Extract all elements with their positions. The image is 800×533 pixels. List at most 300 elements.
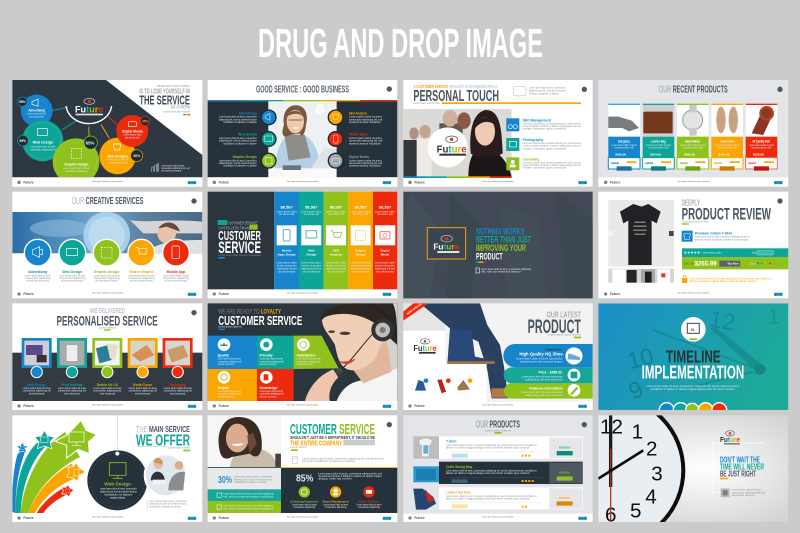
panel: left services: Lorem ipsum dolor sit amet, consectetur xyxy=(219,137,257,140)
circle: web design xyxy=(87,450,147,510)
pill: features: Lorem ipsum dolor sit amet consectetur xyxy=(521,391,563,394)
note: Lorem ipsum dolor sit amet, consectetur adipiscing elit, sed do eiusmod xyxy=(302,457,384,460)
panel: right services: Lorem ipsum dolor sit amet, xyxy=(349,116,383,119)
settings icon xyxy=(777,87,783,92)
footer: Your topic of Business presentation xyxy=(92,404,123,407)
column: digital media: sit amet consectetur xyxy=(375,264,395,267)
heading: Lorem ipsum dolor sit amet xyxy=(413,102,440,105)
service: photography xyxy=(506,138,581,151)
clock face: 2 xyxy=(646,437,657,460)
column: seo analysis: Analysis xyxy=(330,253,342,257)
panel: dark stats: Lorem ipsum dolor sit amet xyxy=(292,503,317,506)
footer: Future xyxy=(23,516,34,520)
feature: premium cotton t-shirt: Premium Cotton T-Shirt xyxy=(695,231,733,235)
settings icon xyxy=(582,87,587,92)
band: price: $265.99 xyxy=(695,261,717,267)
tile labels: Lorem ipsum dolor sit amet xyxy=(23,387,51,390)
product card: sunglass: Lorem ipsum dolor sit amet xyxy=(612,144,637,147)
footer xyxy=(17,292,196,296)
calendar badge: 01 xyxy=(691,328,695,332)
heading: PERSONALISED SERVICE xyxy=(57,312,158,328)
tile: knowledge: Lorem ipsum dolor sit amet xyxy=(260,390,283,393)
column: seo analysis: adipiscing elit sed xyxy=(326,267,347,270)
pill: high quality: Product Name xyxy=(545,348,562,351)
product card: loafer shoe xyxy=(711,104,743,171)
band: rating: Size xyxy=(752,253,757,255)
circle: seo analysis: 36% xyxy=(133,154,141,158)
icon and note: chart: Lorem ipsum dolor sit amet, xyxy=(161,164,185,167)
panel: left services xyxy=(208,101,268,177)
product row: cloth bag: $266.99 xyxy=(559,471,570,475)
service labels: elit sed eiusmod tempor xyxy=(61,280,84,283)
heading: nothing works: NOTHING WORKS xyxy=(476,226,524,236)
circle: graphic design: Lorem ipsum dolor sit amet xyxy=(63,167,90,170)
column: web design: $6,587 xyxy=(305,205,318,210)
panel: right services: consectetur adipiscing elit, sed xyxy=(349,162,383,165)
faint clock face: 9 xyxy=(624,375,647,405)
settings icon xyxy=(387,86,392,92)
heading xyxy=(218,309,302,330)
footer xyxy=(403,402,593,410)
column: graphic design: Lorem ipsum dolor xyxy=(351,261,371,264)
tile: knowledge: sed do eiusmod xyxy=(260,396,277,398)
panel: thirty percent: adipiscing elit, sed do eiusmod tempor xyxy=(234,478,272,481)
product card: leather bag: Leather Bag xyxy=(651,140,666,144)
qr icon and note xyxy=(721,488,766,497)
footer: Future xyxy=(219,180,229,184)
column: digital media: Lorem ipsum dolor xyxy=(375,261,395,264)
column: mobile apps design: do eiusmod xyxy=(278,271,296,273)
product card: belt xyxy=(746,104,777,171)
band: green xyxy=(208,501,281,513)
heading: Lorem ipsum dolor sit xyxy=(218,326,242,329)
footer: Your topic of Business presentation xyxy=(287,516,318,519)
connectors xyxy=(52,107,117,140)
logo box xyxy=(427,228,466,259)
background photo: hanging shirts xyxy=(403,192,593,298)
feature: premium cotton t-shirt xyxy=(682,231,751,242)
qr icon and note: eiusmod tempor xyxy=(732,494,755,497)
column: mobile apps design: sit amet consectetur xyxy=(277,264,297,267)
tile: quality: sed do eiusmod xyxy=(218,364,235,366)
product row: leather shoe xyxy=(413,487,583,510)
panel: left services: adipiscing elit, sed do eiusmod tempor xyxy=(219,118,257,121)
circle: advertising: Lorem ipsum dolor sit xyxy=(27,113,46,116)
logo panel: Future xyxy=(413,344,437,353)
band: teal xyxy=(208,489,281,501)
circle: advertising xyxy=(18,95,53,127)
footer: Your topic of Business presentation xyxy=(92,292,123,295)
product card: hand watch: Hand Watch xyxy=(685,140,700,144)
footer: Future xyxy=(219,292,229,296)
tile labels: Print Mockup xyxy=(61,383,83,387)
heading: Lorem ipsum dolor sit amet xyxy=(682,220,709,223)
heading xyxy=(720,455,764,479)
slide 9: personalised service xyxy=(12,303,202,410)
service: seo management: minim veniam quis nostrud xyxy=(523,128,567,131)
tile: knowledge: consectetur adipiscing elit xyxy=(260,393,284,396)
heading: Lorem ipsum dolor sit amet xyxy=(548,334,581,337)
clock face: 3 xyxy=(651,462,663,485)
tile: friendly: consectetur adipiscing elit xyxy=(260,360,284,363)
panel: thirty percent: 30% xyxy=(218,475,232,486)
icon and note: chart xyxy=(152,164,190,173)
column: seo analysis: Lorem ipsum dolor xyxy=(326,261,346,264)
footer: Your topic of Business presentation xyxy=(92,516,123,519)
circle: digital media xyxy=(116,115,150,147)
photo: agent with headset xyxy=(305,303,397,401)
feature: premium cotton t-shirt: Lorem ipsum dolor sit amet, consectetur adipiscing elit sed do xyxy=(695,236,751,239)
footer xyxy=(598,177,788,187)
circle: advertising: amet, consectetur xyxy=(29,115,44,118)
clock face xyxy=(598,415,686,522)
slide 3: personal touch xyxy=(403,80,593,187)
tile: satisfaction: sed do eiusmod xyxy=(297,364,314,366)
footer xyxy=(604,292,783,296)
faint clock face xyxy=(628,310,778,398)
footer: Future xyxy=(414,516,425,520)
service: consulting: Consulting xyxy=(523,157,539,161)
panel: left services: Lorem ipsum dolor sit amet, consectetur xyxy=(219,159,257,162)
column: seo analysis xyxy=(324,192,348,289)
tile labels: Lorem ipsum dolor sit amet xyxy=(164,387,192,390)
column: digital media: sit amet elit xyxy=(377,213,393,216)
pill: price: Price : $456.00 xyxy=(539,371,562,375)
band: price: Buy Now xyxy=(728,263,738,266)
slide 13: main service we offer xyxy=(12,415,202,522)
star: green web xyxy=(55,420,97,458)
heading: PERSONAL TOUCH xyxy=(413,88,499,105)
circle: web design: Lorem ipsum dolor sit amet, consectetur xyxy=(100,488,137,491)
slide 16: don't wait clock xyxy=(598,415,788,522)
heading: OUR CREATIVE SERVICES xyxy=(72,196,144,207)
column: web design: Design xyxy=(306,253,316,257)
service labels: elit sed eiusmod tempor xyxy=(26,280,49,283)
service: photography: minim veniam quis nostrud xyxy=(523,147,567,150)
heading: WE ARE READY TO LOYALTY xyxy=(218,309,281,316)
qr icon and note: Lorem ipsum dolor sit amet, xyxy=(732,489,762,492)
product card: belt: consectetur elit xyxy=(751,147,772,150)
product card: sunglass xyxy=(608,104,640,171)
heading xyxy=(136,424,190,451)
logo arc and wordmark xyxy=(66,98,112,124)
note: incididunt ut labore et dolore xyxy=(149,505,182,508)
heading xyxy=(413,84,581,105)
panel: right services: SEO Analysis xyxy=(349,111,367,115)
panel: dark stats: Lorem ipsum dolor sit amet xyxy=(323,503,348,506)
column: graphic design: $6,587 xyxy=(355,205,368,210)
product card: belt: Hi Quality Belt xyxy=(753,140,771,144)
column: mobile apps design: Mobile xyxy=(282,249,292,253)
column: graphic design: Design xyxy=(356,253,366,257)
panel: left services: Lorem ipsum dolor sit amet, consectetur xyxy=(219,116,257,119)
tile: quality: Quality xyxy=(218,354,229,358)
logo xyxy=(720,431,740,444)
star: blue xyxy=(16,442,28,453)
panel: dark title: CUSTOMER SERVICE xyxy=(227,220,257,225)
footer: Future xyxy=(219,404,229,408)
pill: high quality: High Quality HQ Shoe xyxy=(519,352,563,357)
faint clock face: 12 xyxy=(707,305,738,335)
heading: OUR RECENT PRODUCTS xyxy=(659,85,728,96)
heading: customer service: Lorem ipsum xyxy=(290,446,307,449)
product card: belt: Lorem ipsum dolor sit amet xyxy=(749,144,774,147)
tile labels: Packaging xyxy=(169,383,186,387)
heading: customer service: SHOULDN'T JUST BE A DEPARTMENT, IT SHOULD BE xyxy=(290,435,375,441)
circle: web design: consectetur adipiscing elit xyxy=(30,148,56,151)
circle: graphic design: Graphic Design xyxy=(64,161,89,166)
panel: dark stats: 85% xyxy=(296,473,313,484)
service: seo management: SEO Management xyxy=(523,118,552,122)
panel: dark title: SERVICE xyxy=(218,238,261,257)
heading: TIME WILL NEVER xyxy=(720,463,764,472)
product card: belt: $228.99 xyxy=(753,152,764,156)
service labels: Web Design xyxy=(62,270,82,274)
service circles xyxy=(24,239,189,266)
pill: high quality: Lorem ipsum dolor sit amet consectetur xyxy=(516,357,563,360)
heading: OUR PRODUCTS xyxy=(476,420,520,431)
circle: seo analysis: SEO Analysis xyxy=(107,154,128,158)
rainbow star streaks xyxy=(12,432,80,513)
heading: BE JUST RIGHT xyxy=(720,470,756,479)
circle: digital media: 45% xyxy=(142,119,149,123)
pill: high quality xyxy=(503,344,593,367)
settings icon xyxy=(777,198,783,204)
panel: left services: incididunt ut labore et dolore xyxy=(223,165,257,168)
tile: quality: consectetur adipiscing elit xyxy=(218,360,242,363)
body text xyxy=(647,385,740,391)
panel: right services: Mobile Apps xyxy=(349,133,368,137)
band: price: Color xyxy=(750,262,756,265)
panel: left services: adipiscing elit, sed do eiusmod tempor xyxy=(219,162,257,165)
circle: web design: Web Design xyxy=(104,482,131,487)
tile: satisfaction: consectetur adipiscing elit xyxy=(297,360,321,363)
tile labels: sed eiusmod xyxy=(100,393,116,395)
icon glyphs xyxy=(265,114,339,164)
service labels: elit sed eiusmod tempor xyxy=(165,280,188,283)
photo: team xyxy=(403,109,512,177)
heading: customer service xyxy=(290,422,375,451)
heading xyxy=(682,198,771,225)
dotted connector xyxy=(116,415,118,450)
tile: knowledge: Knowledge xyxy=(260,386,278,390)
tile labels: sed eiusmod xyxy=(29,393,45,395)
speech bubble note: adipiscing elit, sed do eiusmod xyxy=(529,89,566,92)
notice: lock xyxy=(682,275,771,283)
tile labels: Lorem ipsum dolor sit amet xyxy=(58,387,86,390)
speech bubble note: tempor incididunt ut labore xyxy=(529,92,560,95)
note xyxy=(292,456,384,464)
column: seo analysis: do eiusmod xyxy=(327,271,346,273)
heading: customer service: CUSTOMER SERVICE xyxy=(290,422,375,438)
product card: sunglass: consectetur elit xyxy=(614,147,634,150)
pill: high quality: adipiscing elit sed eiusmod tempor xyxy=(520,360,563,363)
note: elit, sed do eiusmod tempor xyxy=(481,271,521,274)
slide 15: our products xyxy=(403,415,593,522)
tile labels: Book Cover xyxy=(133,383,153,387)
pill: price: Lorem ipsum dolor sit amet consectetur xyxy=(521,375,563,378)
heading: the service: OF OTHERS xyxy=(171,105,190,110)
star: orange xyxy=(67,463,86,481)
panel: dark stats: Lorem ipsum dolor sit amet, consectetur adipiscing elit, sed xyxy=(318,472,382,475)
circle: seo analysis: consectetur elit xyxy=(108,162,128,165)
heading: A CUSTOMER SERVICE APOLOGY IS STRONGER WITH A xyxy=(413,84,498,90)
footer xyxy=(17,516,196,520)
column: web design: sit amet consectetur xyxy=(301,264,322,267)
body text: Lorem ipsum dolor sit amet, consectetur adipiscing elit, sed do eiusmod tempor xyxy=(647,385,740,388)
slide 12: timeline implementation xyxy=(598,303,788,417)
product row: t-shirt: Lorem ipsum dolor sit amet, consectetur adipiscing elit, sed do eiusmod tempor incididunt ut xyxy=(446,444,537,447)
shoe thumbnails xyxy=(412,378,472,394)
tile: satisfaction xyxy=(294,336,339,369)
service labels: Lorem ipsum dolor sit amet xyxy=(25,274,51,277)
logo box: Future xyxy=(433,242,460,251)
heading: nothing works: BETTER THAN JUST xyxy=(476,235,531,245)
tile: helpful: sed do eiusmod xyxy=(218,396,235,398)
photo: woman xyxy=(268,101,337,177)
service labels: Advertising xyxy=(28,270,47,274)
tile labels: Lorem ipsum dolor sit amet xyxy=(129,387,157,390)
slide 6: customer service columns xyxy=(208,192,397,298)
notice: lock: labore et dolore magna aliqua enim ad minim veniam xyxy=(690,280,757,283)
slide 5: creative services xyxy=(12,192,202,298)
tile labels: Mobile UI/ UX xyxy=(97,383,119,387)
text panel outline xyxy=(712,443,765,493)
footer xyxy=(213,516,391,520)
calendar badge xyxy=(681,317,706,342)
service: consulting: minim veniam quis nostrud xyxy=(523,167,567,170)
icon and note: chart: do eiusmod tempor xyxy=(161,170,182,173)
circle: seo analysis xyxy=(99,138,143,174)
panel: left services: incididunt ut labore et dolore xyxy=(223,142,257,145)
heading: GOOD SERVICE : GOOD BUSINESS xyxy=(256,85,349,96)
ribbon: new: NEW ARRIVAL xyxy=(406,302,423,316)
service labels xyxy=(25,270,190,283)
footer: Future xyxy=(219,516,229,520)
panel: right services: Lorem ipsum dolor sit amet, xyxy=(349,137,383,140)
round icons xyxy=(31,366,183,378)
service labels: Lorem ipsum dolor sit amet xyxy=(163,274,189,277)
heading xyxy=(476,420,520,434)
faint clock face: 1 xyxy=(768,306,779,328)
product card: loafer shoe: consectetur elit xyxy=(717,147,737,150)
speech bubble note xyxy=(513,86,566,97)
heading xyxy=(528,309,581,338)
panel: left services: incididunt ut labore et dolore xyxy=(223,121,257,124)
settings icon xyxy=(387,422,392,427)
dark diagonal background xyxy=(12,80,202,177)
panel: right services: eiusmod tempor incididunt xyxy=(349,121,381,124)
clock face: 4 xyxy=(645,486,657,509)
product card: hand watch: $800.99 xyxy=(684,152,695,156)
service labels: Search Engine xyxy=(129,270,153,274)
panel: right services: eiusmod tempor incididunt xyxy=(349,165,381,168)
slide 7: nothing works better xyxy=(403,192,593,298)
heading: nothing works: PRODUCT xyxy=(476,251,503,261)
pill: price xyxy=(504,367,593,383)
title: DRUG AND DROP IMAGE xyxy=(258,20,543,66)
footer xyxy=(17,404,196,408)
product row: t-shirt: T-Shirt xyxy=(446,440,457,444)
footer xyxy=(213,404,391,408)
product card: hand watch xyxy=(677,104,709,171)
heading: PRODUCT xyxy=(528,317,581,338)
tile: helpful xyxy=(208,369,257,401)
product card: loafer shoe: $484.99 xyxy=(719,152,730,156)
service labels: elit sed eiusmod tempor xyxy=(130,280,153,283)
column: graphic design xyxy=(348,192,373,289)
circle: web design: 35% xyxy=(19,139,26,143)
product card: loafer shoe: Lorem ipsum dolor sit amet xyxy=(715,144,740,147)
service labels: Lorem ipsum dolor sit amet xyxy=(128,274,155,277)
column: seo analysis: Lorem ipsum dolor xyxy=(326,210,346,213)
colour strip xyxy=(403,176,512,178)
column: web design: Lorem ipsum dolor xyxy=(301,261,322,264)
photo: jeans and shoes xyxy=(403,303,593,398)
tile labels: sed eiusmod xyxy=(170,393,186,395)
product row: leather shoe: labore et dolore magna aliqua enim ad minim veniam quis nostrud xyxy=(446,498,530,501)
star: teal xyxy=(35,430,54,449)
tile: helpful: Helpful xyxy=(218,386,229,390)
panel: dark stats: consectetur adipiscing xyxy=(325,506,347,509)
service: seo management: tempor incididunt ut labore et dolore magna aliqua enim ad xyxy=(523,125,581,128)
column: web design xyxy=(299,192,324,289)
heading: the service: IS TO LOSE YOURSELF IN xyxy=(139,89,190,96)
pill: features: Features description xyxy=(529,387,563,391)
note: adipiscing elit, sed do eiusmod tempor xyxy=(149,503,187,506)
heading: DEEPLY xyxy=(682,198,700,208)
tile: friendly: Lorem ipsum dolor sit amet xyxy=(260,358,283,361)
panel: thirty percent: incididunt ut labore et dolore xyxy=(234,481,268,484)
band: teal: elit, sed do eiusmod tempor incididunt xyxy=(223,495,274,498)
product row: leather shoe: Lorem ipsum dolor sit amet, consectetur adipiscing elit, sed do eiusmod tempor incididunt ut xyxy=(446,495,537,498)
circle: advertising: 55% xyxy=(19,100,26,104)
feature: premium cotton t-shirt: eiusmod tempor incididunt ut labore et dolore magna xyxy=(695,238,749,241)
service: consulting: tempor incididunt ut labore et dolore magna aliqua enim ad xyxy=(523,164,581,167)
column: web design: Web xyxy=(308,249,315,253)
clock face: 5 xyxy=(630,499,641,522)
service: consulting: Lorem ipsum dolor sit amet, consectetur adipiscing elit, sed do eiusmod xyxy=(523,161,581,164)
footer: Future xyxy=(414,404,425,408)
tile: quality xyxy=(208,336,257,369)
ribbon: new xyxy=(403,302,428,321)
slide 4: recent products xyxy=(598,80,788,187)
heading: the service xyxy=(139,85,190,115)
column: mobile apps design xyxy=(274,192,299,289)
panel: left services: adipiscing elit, sed do eiusmod tempor xyxy=(219,140,257,143)
column: mobile apps design: Lorem ipsum dolor xyxy=(277,261,297,264)
panel: dark title: Lorem ipsum dolor sit amet consectetur xyxy=(218,254,261,257)
circle icons xyxy=(32,246,179,259)
column: mobile apps design: sit amet elit xyxy=(279,213,295,216)
photo circle: meeting xyxy=(144,453,188,497)
star: red xyxy=(62,485,74,497)
column: digital media: do eiusmod xyxy=(376,271,395,273)
panel: left services: Web Design xyxy=(238,133,257,137)
footer: Your topic of Business presentation xyxy=(482,404,514,407)
product row: cloth bag: labore et dolore magna aliqua enim ad minim veniam quis nostrud xyxy=(446,472,530,475)
icon and note: chart: consectetur adipiscing elit, sed xyxy=(161,167,190,170)
panel: dark stats: consectetur adipiscing xyxy=(293,506,316,509)
footer: Your topic of Business presentation xyxy=(287,180,318,183)
product row: cloth bag: Cloth Swing Bag xyxy=(446,465,472,469)
note xyxy=(147,500,187,508)
circle: digital media: Lorem ipsum dolor xyxy=(123,134,142,137)
footer xyxy=(12,177,202,187)
service: photography: tempor incididunt ut labore et dolore magna aliqua enim ad xyxy=(523,145,581,148)
column: graphic design: Graphic xyxy=(355,249,367,253)
rainbow divider xyxy=(208,100,397,101)
